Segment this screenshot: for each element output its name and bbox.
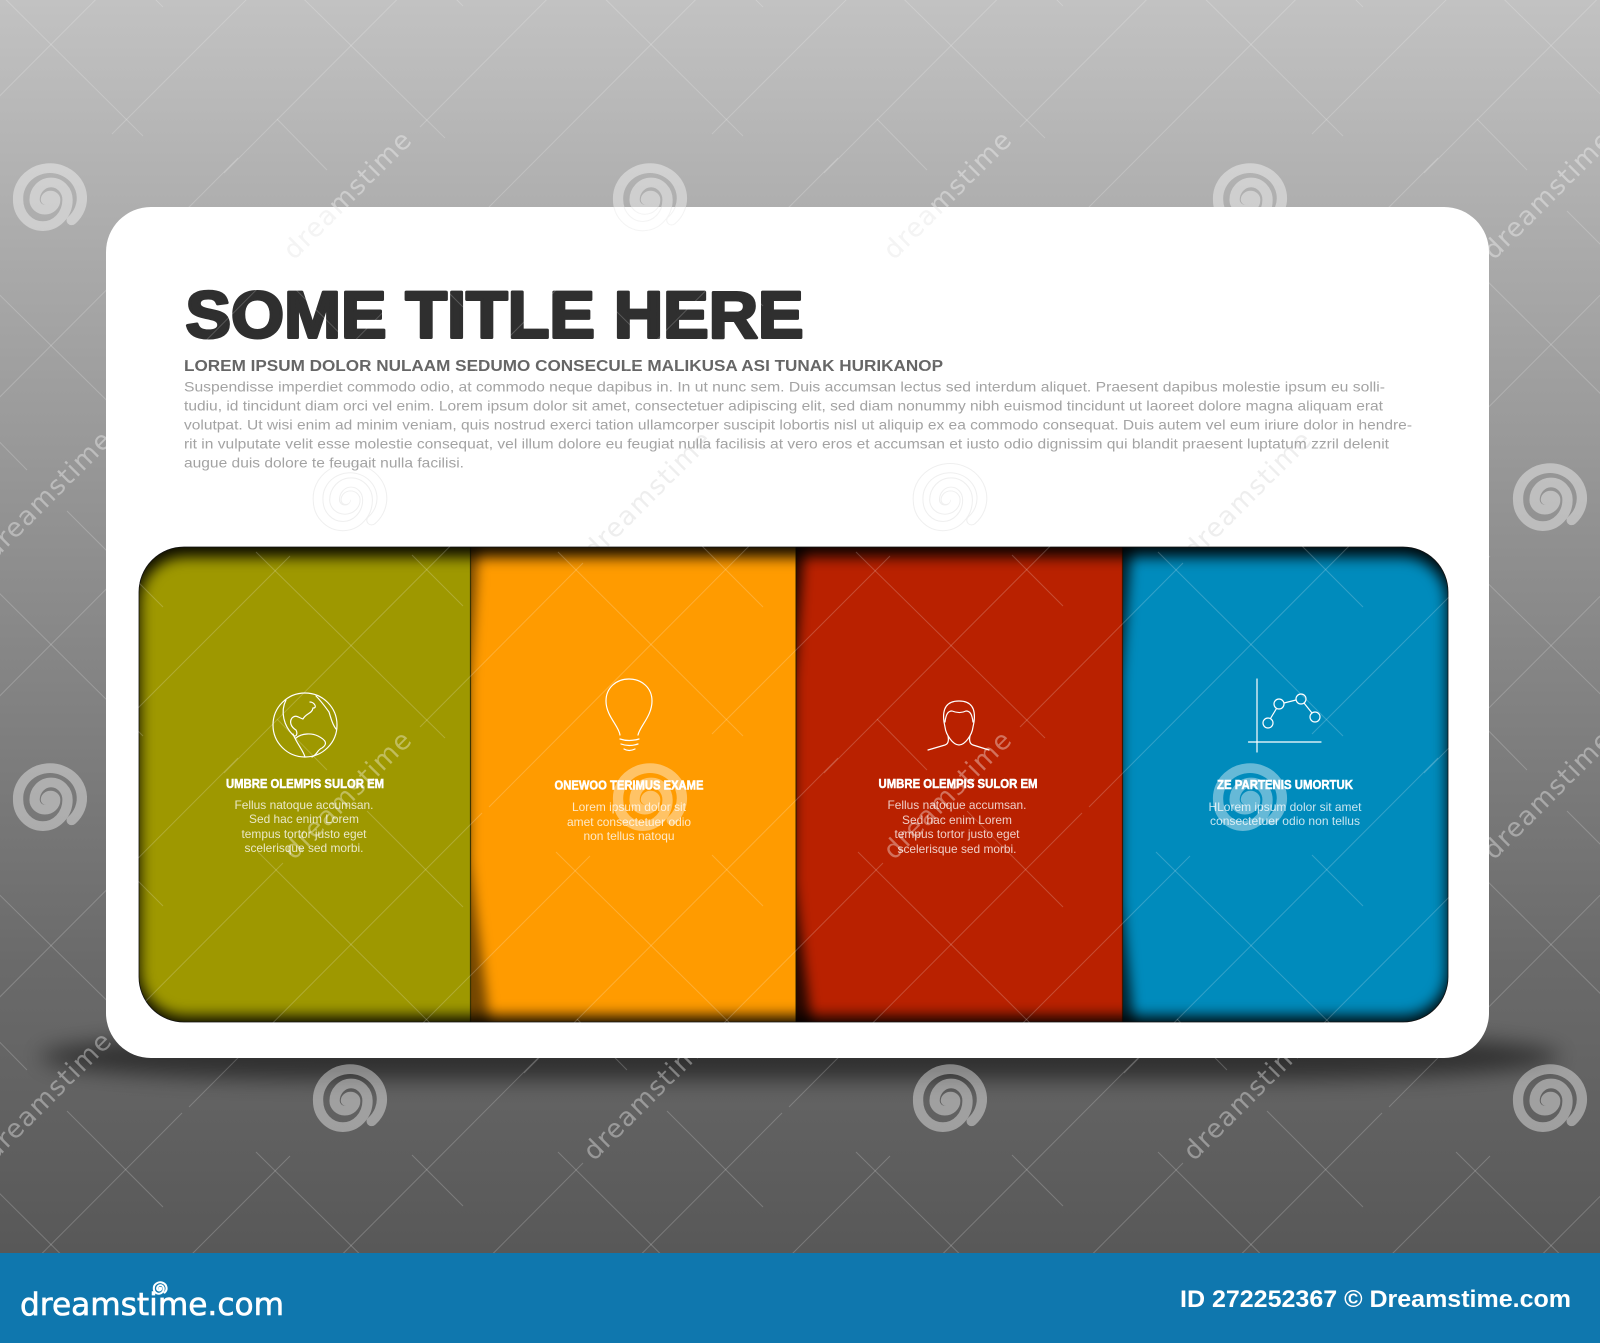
- panel text: orange: [554, 778, 704, 843]
- intro paragraph: rit in vulputate velit esse molestie consequat, vel illum dolore eu feugiat nulla facilisis at vero eros et accumsan et iusto odio dignissim qui blandit praesent luptatum zzril delenit: [184, 436, 1389, 452]
- panel text: olive: tempus tortor justo eget: [242, 827, 367, 841]
- watermark words: dreamstime: [578, 1027, 718, 1167]
- panel text: red: Fellus natoque accumsan.: [888, 798, 1026, 812]
- panel: blue: [1123, 547, 1448, 1022]
- watermark words: [0, 126, 1600, 1167]
- panel: red: [796, 547, 1123, 1022]
- panel text: olive: Fellus natoque accumsan.: [234, 798, 374, 812]
- subtitle: LOREM IPSUM DOLOR NULAAM SEDUMO CONSECULE MALIKUSA ASI TUNAK HURIKANOP: [184, 358, 943, 375]
- icon: light bulb: [606, 679, 652, 750]
- panel text: olive: scelerisque sed morbi.: [244, 841, 364, 855]
- card drop shadow: [40, 1034, 1560, 1080]
- title: SOME TITLE HERE: [186, 278, 804, 352]
- intro paragraph: volutpat. Ut wisi enim ad minim veniam, quis nostrud exerci tation ullamcorper suscipit lobortis nisl ut aliquip ex ea commodo consequat. Duis autem vel eum iriure dolor in hendre-: [184, 416, 1412, 432]
- panel text: orange: ONEWOO TERIMUS EXAME: [554, 778, 704, 792]
- panel text: orange: amet consectetuer odio: [567, 815, 691, 829]
- faint watermarks on card: dreamstime: [578, 426, 718, 566]
- panel text: blue: [1208, 778, 1362, 828]
- panel dividers: [470, 547, 1122, 1022]
- footer logo: dreamstime.com: [20, 1287, 284, 1323]
- panel text: red: UMBRE OLEMPIS SULOR EM: [878, 777, 1038, 791]
- panel text: red: scelerisque sed morbi.: [898, 842, 1016, 856]
- panel: orange: [471, 547, 796, 1022]
- icon: globe: [273, 693, 337, 757]
- footer bar: [0, 1253, 1600, 1343]
- orange panel left shadow: [471, 548, 497, 1022]
- panel text: red: [878, 777, 1038, 856]
- panel: olive: [139, 547, 471, 1022]
- intro paragraph: Suspendisse imperdiet commodo odio, at commodo neque dapibus in. In ut nunc sem. Duis accumsan lectus sed interdum aliquet. Praesent dapibus molestie ipsum eu solli-: [184, 378, 1385, 394]
- faint watermarks on card: dreamstime: [278, 126, 418, 266]
- coloured panel group: [139, 547, 1448, 1022]
- icon: person: [928, 701, 989, 750]
- blue panel left shadow: [1123, 548, 1142, 1022]
- footer image id: ID 272252367 © Dreamstime.com: [1180, 1286, 1571, 1313]
- panel text: blue: HLorem ipsum dolor sit amet: [1208, 800, 1362, 814]
- panel text: olive: Sed hac enim Lorem: [249, 812, 359, 826]
- panel outer hairline: [139, 547, 1448, 1022]
- white card: [106, 207, 1489, 1058]
- inner shadow frame: [139, 547, 1448, 1022]
- panel text: blue: consectetuer odio non tellus: [1210, 814, 1360, 828]
- faint watermarks on card: [278, 126, 1318, 566]
- panel text: olive: UMBRE OLEMPIS SULOR EM: [226, 777, 384, 791]
- red panel left shadow: [796, 548, 819, 1022]
- watermark words: dreamstime: [278, 126, 418, 266]
- panel text: red: Sed hac enim Lorem: [902, 813, 1012, 827]
- icon: line chart: [1248, 679, 1321, 752]
- panel text: olive: [226, 777, 384, 855]
- intro paragraph: tudiu, id tincidunt diam orci vel enim. Lorem ipsum dolor sit amet, consectetuer adipiscing elit, sed diam nonummy nibh euismod tincidunt ut laoreet dolore magna aliquam erat: [184, 398, 1383, 414]
- panel text: orange: non tellus natoqu: [584, 829, 674, 843]
- watermark words: dreamstime: [878, 126, 1018, 266]
- faint watermarks on card: dreamstime: [1178, 426, 1318, 566]
- panel text: red: tempus tortor justo eget: [894, 827, 1020, 841]
- watermark words: dreamstime: [278, 726, 418, 866]
- panel text: orange: Lorem ipsum dolor sit: [572, 800, 687, 814]
- faint watermarks on card: dreamstime: [878, 126, 1018, 266]
- watermark words: dreamstime: [1178, 1027, 1318, 1167]
- watermark spirals: [18, 168, 1582, 1127]
- watermark words: dreamstime: [878, 726, 1018, 866]
- panel text: blue: ZE PARTENIS UMORTUK: [1217, 778, 1353, 792]
- intro paragraph: [184, 378, 1412, 470]
- intro paragraph: augue duis dolore te feugait nulla facilisi.: [184, 454, 464, 470]
